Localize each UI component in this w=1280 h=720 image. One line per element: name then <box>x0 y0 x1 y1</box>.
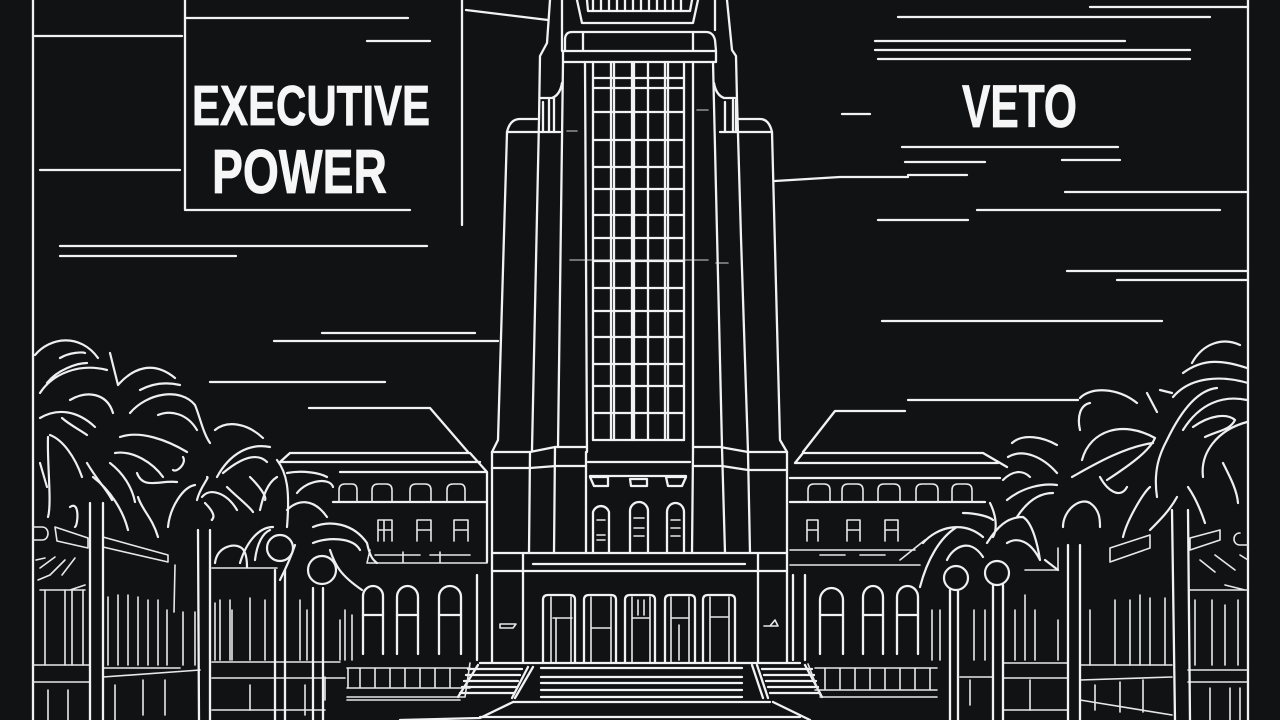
front stairs and plaza <box>400 663 822 720</box>
tower <box>492 0 787 452</box>
upper windows <box>790 484 972 565</box>
balustrade <box>347 663 470 700</box>
heading: executive power: POWER <box>212 138 387 207</box>
right wing building <box>790 453 1007 697</box>
faint crossbars <box>567 110 728 263</box>
palm fronds left group <box>35 340 377 590</box>
palm fronds right group <box>920 342 1248 590</box>
heading: veto: VETO <box>962 73 1077 140</box>
tower base bays <box>492 447 787 662</box>
palm tree trunks left <box>90 503 323 720</box>
lower arched windows <box>363 575 477 660</box>
left annotation lines <box>35 0 548 452</box>
upper windows <box>339 484 487 563</box>
left colonnade and ground <box>33 527 352 720</box>
heading: executive power <box>192 74 430 207</box>
left wing building <box>280 453 487 700</box>
right annotation lines <box>775 7 1248 452</box>
roof <box>280 453 487 562</box>
entrance doors <box>543 595 735 663</box>
balustrade <box>808 664 937 697</box>
right colonnade and ground <box>932 530 1248 720</box>
palm tree trunks right <box>950 510 1190 720</box>
heading: executive power: EXECUTIVE <box>192 74 430 138</box>
tower window grid <box>593 62 684 440</box>
tower shaft outlines <box>492 0 787 452</box>
arched windows in tower <box>593 502 684 553</box>
tower crown <box>562 0 716 62</box>
lower arched windows <box>793 575 918 660</box>
roof <box>790 453 1007 502</box>
